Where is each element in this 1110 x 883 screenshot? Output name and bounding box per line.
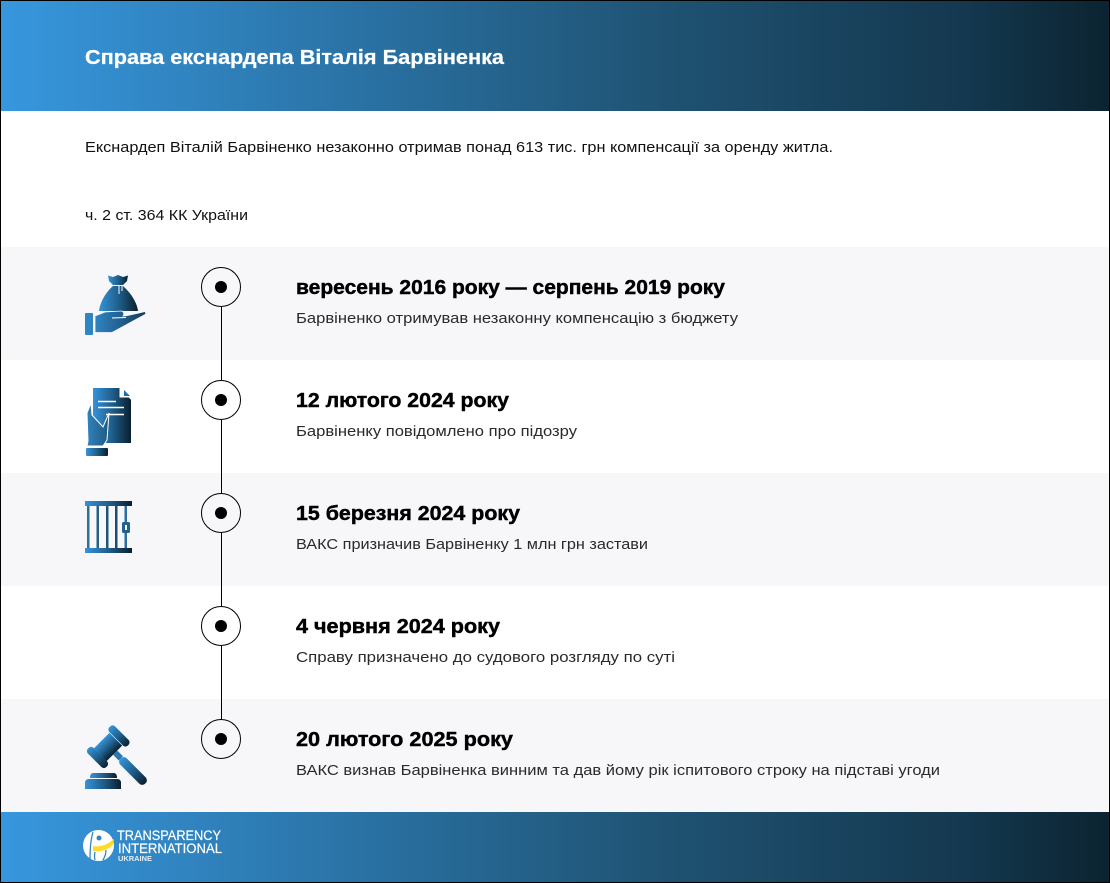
timeline node 1 — [202, 268, 240, 306]
event 3 date: 15 березня 2024 року — [296, 502, 521, 525]
timeline node 5 — [202, 720, 240, 758]
row background: 15 March 2024 — [1, 473, 1109, 586]
timeline node 3 — [202, 494, 240, 532]
event 5 description: ВАКС визнав Барвіненка винним та дав йому рік іспитового строку на підставі угоди — [296, 763, 940, 779]
legal article reference: ч. 2 ст. 364 КК України — [85, 208, 248, 224]
icon: prison bars with lock — [85, 501, 132, 553]
row background: 20 February 2025 — [1, 699, 1109, 812]
event 2 — [296, 389, 578, 440]
row background: 2016–2019 — [1, 247, 1109, 360]
event 3 description: ВАКС призначив Барвіненку 1 млн грн застави — [296, 537, 648, 553]
intro text: Екснардеп Віталій Барвіненко незаконно отримав понад 613 тис. грн компенсації за оренду житла. — [85, 140, 833, 156]
event 1 description: Барвіненко отримував незаконну компенсацію з бюджету — [296, 311, 739, 327]
event 1 — [296, 276, 739, 327]
event 3 — [296, 502, 648, 553]
event 4 — [296, 615, 675, 666]
event 2 date: 12 лютого 2024 року — [296, 389, 510, 412]
logo: Transparency International Ukraine: UKRAINE — [118, 856, 152, 863]
logo: Transparency International Ukraine: INTERNATIONAL — [118, 841, 222, 856]
event 4 description: Справу призначено до судового розгляду по суті — [296, 650, 675, 666]
timeline axis — [202, 268, 240, 758]
logo: Transparency International Ukraine: TRANSPARENCY — [117, 828, 221, 843]
title: Справа екснардепа Віталія Барвіненка — [85, 46, 505, 69]
timeline node 2 — [202, 380, 240, 420]
timeline node 4 — [202, 606, 240, 646]
event 1 date: вересень 2016 року — серпень 2019 року — [296, 276, 726, 299]
icon: money bag on hand — [85, 275, 146, 335]
event 5 — [296, 728, 940, 779]
footer banner — [1, 812, 1109, 882]
event 4 date: 4 червня 2024 року — [296, 615, 501, 638]
icon: judge gavel — [85, 724, 149, 789]
event 2 description: Барвіненку повідомлено про підозру — [296, 424, 578, 440]
event 5 date: 20 лютого 2025 року — [296, 728, 514, 751]
header banner — [1, 1, 1109, 111]
icon: hand holding document — [86, 388, 131, 456]
logo: Transparency International Ukraine — [83, 828, 222, 863]
